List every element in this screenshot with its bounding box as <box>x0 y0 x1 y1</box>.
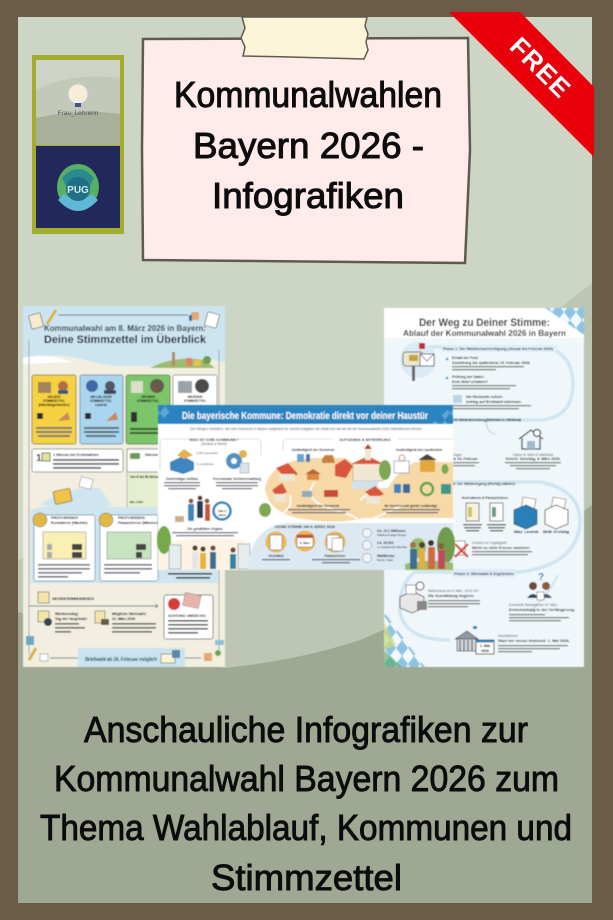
text: runoff: Eventuelle Stichwahl am 22. März: <box>509 603 558 607</box>
panel: was ist eine Kommune: 2.056 Gemeinden <box>196 451 219 455</box>
tape <box>241 17 368 59</box>
icon: sheets circle <box>324 532 346 552</box>
icon: mailbox <box>400 342 436 381</box>
icon: white ballot box: Weiß: Kreistag <box>543 530 570 534</box>
panel: profi tips: PROFI-WISSEN: <box>51 516 79 520</box>
labels: own tasks: Ihr Gemeinderat gehört zuständige <box>385 504 438 508</box>
text: phase 1 steps: Antrag auf Briefwahl ablehnen. <box>466 400 522 404</box>
text: phase 1 steps: Zustellung bis spätestens 15. Februar 2026. <box>452 361 531 365</box>
text: election day: Wahlsonntag: <box>55 612 79 616</box>
text: phase 1 steps: Erhalt der Post: <box>452 356 479 360</box>
text: election day: Tag der Hauptwahl <box>55 617 87 621</box>
stats: Wahlberechtigte Bürger <box>377 533 406 537</box>
path: flow arrows <box>400 347 580 640</box>
icon: blue ballot box: Blau: Landrat <box>514 530 539 534</box>
text: start of term <box>498 634 570 652</box>
icon: ballot circle <box>266 532 286 552</box>
text: counting: Die Auszählung beginnt. <box>428 593 475 598</box>
panel: deine Stimme: DEINE STIMME AM 8. MÄRZ 2026 <box>275 525 335 529</box>
infographic: Stimmzettel <box>23 306 225 667</box>
text: counting: Wahlschluss am 8. März, 18:00 Uhr. <box>428 589 479 593</box>
card: yellow ballot: GELBER <box>47 395 61 399</box>
stats: Ca. 10,1 Millionen <box>377 529 405 533</box>
icon: red cross <box>453 541 468 557</box>
text: start of term: Start der neuen Amtszeit: 1. Mai 2026. <box>498 638 570 643</box>
text: phase 1 steps: Kein Brief erhalten? <box>452 380 489 384</box>
icon: calendar date: 2026 <box>481 649 489 653</box>
icon: calendar circle: 8. März <box>300 541 311 545</box>
panel: was ist eine Kommune: 71 Landkreise <box>196 462 214 466</box>
card: blue ballot: Landrat <box>95 403 108 407</box>
infographic: Die bayerische Kommune <box>157 405 455 570</box>
card: white ballot: STIMMZETTEL <box>184 399 206 403</box>
intro text: Den Bürgern verklären, wie eine Kommune in Bayern aufgebaut ist, welche Aufgaben sie erfüllt und wie sie bei der Kommunalwahl 2026 mitbestimmen können. <box>190 427 423 431</box>
heading <box>403 317 566 338</box>
title: Infografiken <box>212 175 404 216</box>
timeline heading: WICHTIGE TERMINE & REGELN <box>52 596 94 601</box>
box: many votes: Von 6 bis 80 Stimmen <box>130 475 163 479</box>
banner: postal vote <box>50 648 201 667</box>
icon: thumbs up <box>189 312 199 321</box>
panel: profi tips <box>31 504 218 583</box>
icon: two people <box>527 572 552 600</box>
bottom heading <box>40 709 572 898</box>
icon: calendar date <box>476 640 494 654</box>
box: one vote <box>32 449 123 472</box>
timeline heading <box>38 592 94 603</box>
labels: own tasks: Zuständigkeit der Gemeinde <box>297 504 340 508</box>
panel: was ist eine Kommune: WAS IST EINE KOMMUNE? <box>190 438 239 442</box>
label: phase 4: Phase 4: Stichwahl & Ergebnisse <box>454 572 514 576</box>
panel: profi tips: Panaschieren (Mischen) <box>118 521 160 525</box>
heading: Deine Stimmzettel im Überblick <box>44 333 207 346</box>
panel: was ist eine Kommune: Die gewählten Organe <box>187 527 223 531</box>
panel: profi tips: PROFI-WISSEN: <box>118 516 146 520</box>
banner: postal vote: Briefwahl ab 16. Februar möglich <box>85 657 157 663</box>
header band <box>158 405 453 424</box>
card: white ballot: WEISSER <box>188 395 203 399</box>
text: start of term: Anschließend: <box>498 634 518 638</box>
text: runoff: Mögliche Stichwahl: <box>112 612 147 616</box>
text: runoff: Entscheidung in der Verlängerung. <box>509 607 575 612</box>
icon: town hall <box>335 444 391 489</box>
text: phase 1 steps: Die Rückseite nutzen: <box>466 395 503 399</box>
pattern: diamonds bottom <box>384 612 425 667</box>
icons: footer left <box>26 636 48 661</box>
icon: envelope illustration <box>40 477 112 506</box>
text: phase 1 steps <box>446 356 531 409</box>
icon: gears <box>226 450 249 473</box>
card: green ballot <box>126 375 170 444</box>
labels: own tasks <box>288 504 440 513</box>
icon: calendar date: 1. Mai <box>480 644 490 648</box>
heading: Der Weg zu Deiner Stimme: <box>419 317 550 329</box>
icon: PUG globe logo: PUG <box>67 185 89 196</box>
stats: Wahlkreise <box>377 554 395 558</box>
panel: deine Stimme <box>248 523 455 570</box>
text: counting <box>428 589 480 607</box>
icon: cycle <box>214 502 230 520</box>
icon: houses <box>272 454 384 504</box>
panel: was ist eine Kommune <box>160 438 261 536</box>
bottom heading: Kommunalwahl Bayern 2026 zum <box>54 758 559 799</box>
box: many votes: Bis 1.500 <box>130 500 143 504</box>
box: one vote: 1 <box>36 453 42 464</box>
panel: deine Stimme: Grundlast <box>268 554 284 558</box>
illustration: citizens <box>405 527 455 570</box>
card: blue ballot: STIMMZETTEL <box>90 399 112 403</box>
bottom heading: Stimmzettel <box>211 857 402 898</box>
panel: aufgaben und mitwirkung: Zuständigkeit des Landkreises <box>396 448 443 452</box>
card: yellow ballot: (Oberbürgermeister) <box>38 403 70 407</box>
ribbon: FREE: FREE <box>504 31 577 104</box>
card: yellow ballot: STIMMZETTEL <box>43 399 65 403</box>
label: phase 3: 3: Der Wahlvorgang (Richtig wählen) <box>453 482 516 486</box>
bottom heading: Anschauliche Infografiken zur <box>84 709 528 750</box>
icon: blue ballot box <box>514 497 539 534</box>
heading <box>44 324 207 346</box>
icon: white ballot box <box>543 497 570 534</box>
timeline arrow <box>29 604 158 608</box>
panel: aufgaben und mitwirkung <box>259 438 453 522</box>
panel: was ist eine Kommune: (Struktur & Recht) <box>201 442 227 446</box>
callout: invalid: ACHTUNG: UNGÜLTIG! <box>168 613 206 618</box>
header band: Die bayerische Kommune: Demokratie direkt vor deiner Haustür <box>182 411 428 422</box>
stats: Ca. 39.500 <box>377 541 394 545</box>
panel: aufgaben und mitwirkung: AUFGABEN & MITWIRKUNG <box>339 438 391 442</box>
icon: clipboard <box>28 313 44 329</box>
panel: was ist eine Kommune: Kommunale Selbstverwaltung <box>213 477 261 481</box>
icon: counting ballot box <box>400 582 427 613</box>
title: Bayern 2026 - <box>193 125 424 166</box>
text: option B: Option B: Wahl im Wahllokal <box>513 453 553 457</box>
text: phase 1 steps: Prüfung der Daten: <box>452 375 485 379</box>
icon: pencil <box>47 310 56 324</box>
bottom heading: Thema Wahlablauf, Kommunen und <box>40 807 572 848</box>
icons: county services <box>394 454 451 495</box>
panel: profi tips: Kumulieren (Häufeln) <box>51 521 88 525</box>
icon: ballot sheets <box>463 503 506 532</box>
icon: cycle: Jahre <box>218 513 226 517</box>
text: option A: is 16. Februar <box>453 457 478 461</box>
text: runoff <box>95 611 156 633</box>
text: option B: Termin: Sonntag, 8. März 2026. <box>505 457 561 461</box>
heading: cumulate: Kumulieren & Panaschieren <box>462 496 508 500</box>
callout: invalid <box>164 592 213 639</box>
card: blue ballot: HELLBLAUER <box>90 395 112 399</box>
map: sand area <box>265 458 453 522</box>
tree <box>259 503 271 517</box>
text: runoff <box>509 603 575 621</box>
box: many votes: Stimmen <box>145 453 160 457</box>
heading: Kommunalwahl am 8. März 2026 in Bayern: <box>44 324 206 333</box>
text: election day <box>38 611 87 633</box>
panel: deine Stimme: Panaschieren <box>325 554 345 558</box>
text: option B <box>505 453 561 469</box>
stats: Bezirk, Stadt <box>377 558 393 562</box>
box: many votes <box>127 449 187 509</box>
note card <box>142 17 470 263</box>
icon: light bulb <box>68 84 88 107</box>
box: one vote: 1 Stimme bei Direktwahlen <box>53 453 99 457</box>
icon: cycle: Alle 6 <box>218 509 226 513</box>
label: phase 1 <box>442 345 557 352</box>
text: warning: Nicht zu viele Kreuze machen! <box>472 545 530 550</box>
text: runoff: 22. März 2026 <box>112 617 135 621</box>
title <box>174 74 442 216</box>
heading: Ablauf der Kommunalwahl 2026 in Bayern <box>403 329 566 338</box>
icon: building <box>170 449 194 474</box>
path: white roads <box>270 482 403 522</box>
panel: aufgaben und mitwirkung: Zuständigkeit der Gemeinde <box>292 448 335 452</box>
icon: PUG globe logo <box>57 164 99 211</box>
card: white ballot <box>173 375 217 415</box>
icon: clipboard right <box>204 312 220 328</box>
logo panel <box>32 55 124 234</box>
logo name: Frau_Lehrerin <box>58 110 99 117</box>
label: phase 2: Die Wahlentscheidung (Briefwahl vs. Wahllokal) <box>453 418 522 422</box>
card: green ballot: GRÜNER <box>141 394 156 399</box>
card: yellow ballot <box>32 375 76 444</box>
ribbon: FREE <box>449 12 594 157</box>
illustration: voters at booths <box>157 526 250 570</box>
stats: zu vergebende Mandate <box>377 545 408 549</box>
icon: two people: ? <box>538 572 544 583</box>
text: warning: Vorsicht vor Ungültigkeit: <box>472 541 507 545</box>
card: blue ballot <box>80 375 123 444</box>
icon: village <box>172 352 211 366</box>
icon: ballot and officials <box>175 496 210 522</box>
icon: town hall <box>455 626 478 651</box>
text: option A: tragen <box>453 453 462 457</box>
icons: footer right <box>204 640 224 661</box>
pattern: diamonds top <box>545 308 584 335</box>
infographic: Der Weg zu Deiner Stimme <box>384 308 584 667</box>
title: Kommunalwahlen <box>174 74 442 115</box>
label: phase 1: Phase 1: Die Wahlbenachrichtigung (Januar bis Februar 2026) <box>443 347 554 351</box>
icon: calendar circle <box>294 530 316 552</box>
panel: was ist eine Kommune: Zweistufiger Aufbau <box>166 477 198 481</box>
text: warning <box>472 541 532 555</box>
card: green ballot: STIMMZETTEL <box>137 399 159 403</box>
text: option A <box>453 453 479 466</box>
icon: house <box>519 430 543 449</box>
label: phase 4 <box>452 569 516 577</box>
stats <box>362 528 408 562</box>
